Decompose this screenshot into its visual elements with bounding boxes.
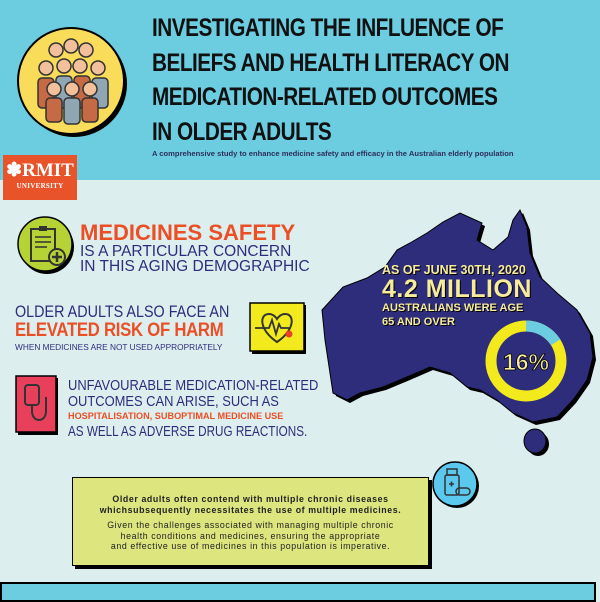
- text: medicines safety: MEDICINES SAFETY: [80, 220, 295, 245]
- panel: unfavourable outcomes: [15, 375, 318, 440]
- title: [152, 14, 509, 146]
- header band: [0, 0, 600, 180]
- logo: RMIT: UNIVERSITY: [17, 182, 63, 190]
- panel: medicines safety: [17, 216, 310, 275]
- text: risk of harm: [15, 303, 229, 352]
- callout: chronic diseases: Older adults often contend with multiple chronic diseases: [112, 494, 389, 504]
- text: population stat: 4.2 MILLION: [382, 275, 532, 303]
- map: Australia with statistic: [322, 209, 596, 456]
- text: population stat: AS OF JUNE 30TH, 2020: [382, 263, 526, 277]
- text: medicines safety: [80, 220, 310, 275]
- icon: clipboard: [17, 216, 74, 274]
- icon: medicine bottle: [432, 461, 479, 508]
- icon: heartbeat: [249, 302, 306, 354]
- callout: chronic diseases: whichsubsequently necessitates the use of multiple medicines.: [100, 505, 401, 515]
- text: risk of harm: OLDER ADULTS ALSO FACE AN: [15, 303, 229, 321]
- title: MEDICATION-RELATED OUTCOMES: [152, 83, 497, 111]
- icon: elderly group circle: [17, 27, 127, 137]
- text: outcomes: UNFAVOURABLE MEDICATION-RELATED: [68, 377, 318, 394]
- text: outcomes: AS WELL AS ADVERSE DRUG REACTIONS.: [68, 424, 307, 440]
- icon: IV drip: [15, 375, 58, 435]
- subtitle: A comprehensive study to enhance medicine safety and efficacy in the Australian elderly population: [152, 149, 514, 158]
- title: INVESTIGATING THE INFLUENCE OF: [152, 14, 503, 42]
- panel: elevated risk: [15, 302, 306, 354]
- callout: chronic diseases: and effective use of medicines in this population is imperative.: [111, 541, 390, 551]
- callout: chronic diseases: [72, 477, 429, 566]
- footer band: [0, 582, 596, 602]
- logo: RMIT: ✽RMIT: [6, 160, 74, 181]
- text: outcomes: OUTCOMES CAN ARISE, SUCH AS: [68, 393, 279, 410]
- text: risk of harm: WHEN MEDICINES ARE NOT USED APPROPRIATELY: [15, 342, 222, 352]
- text: population stat: [382, 263, 532, 328]
- text: population stat: AUSTRALIANS WERE AGE: [382, 302, 523, 314]
- text: outcomes: HOSPITALISATION, SUBOPTIMAL MEDICINE USE: [68, 411, 283, 422]
- title: IN OLDER ADULTS: [152, 118, 331, 146]
- chart: donut 16%: 16%: [503, 349, 549, 375]
- text: medicines safety: IS A PARTICULAR CONCERN: [80, 243, 291, 260]
- chart: donut 16%: [486, 320, 566, 402]
- callout: chronic diseases: Given the challenges associated with managing multiple chronic: [107, 520, 394, 530]
- callout: chronic diseases: health conditions and medicines, ensuring the appropriate: [121, 530, 380, 540]
- title: BELIEFS AND HEALTH LITERACY ON: [152, 48, 509, 76]
- text: outcomes: [68, 377, 318, 440]
- text: medicines safety: IN THIS AGING DEMOGRAPHIC: [80, 258, 310, 275]
- text: risk of harm: ELEVATED RISK OF HARM: [15, 320, 223, 341]
- text: population stat: 65 AND OVER: [382, 316, 455, 328]
- logo: RMIT: [3, 155, 77, 200]
